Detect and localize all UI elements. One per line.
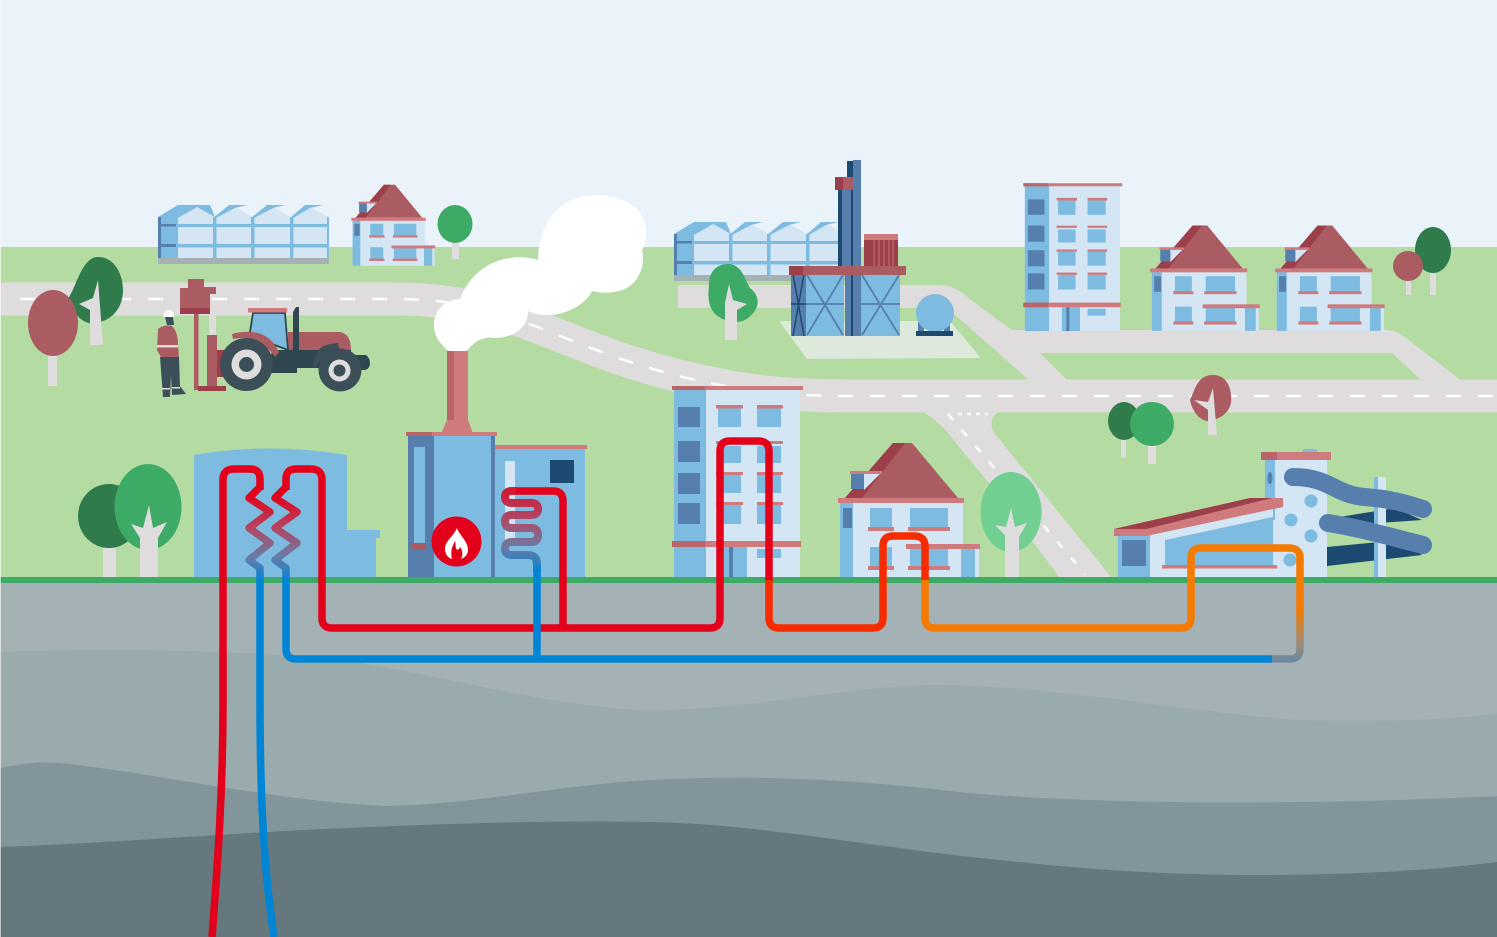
trees: left road [28, 257, 123, 386]
industrial plant [789, 160, 906, 336]
trees: far right [1393, 227, 1451, 295]
platform bar [789, 266, 906, 275]
road: main road [0, 299, 1497, 396]
tractor [220, 307, 370, 392]
pipe: heat exchanger 2 [275, 487, 297, 582]
pipe: network supply (red) [286, 441, 769, 628]
ground layer 2 [0, 650, 1497, 937]
pipe: network return (blue) [286, 580, 1272, 659]
geothermal doublet and heat network pipes [212, 441, 1300, 937]
pipe: production well (hot) [212, 469, 260, 937]
greenhouse: far left [158, 205, 329, 264]
tower [1265, 460, 1327, 578]
house: right 2 [1275, 226, 1385, 331]
grass field [0, 247, 1497, 579]
ground surface strip [0, 577, 1497, 584]
house: right 1 [1150, 226, 1260, 331]
rear wheel [220, 338, 273, 391]
tree: near greenhouse [708, 264, 758, 340]
road markings: branch [948, 414, 1085, 574]
stack [847, 161, 861, 201]
hall [1150, 508, 1273, 578]
pipe: heat exchanger 1 [249, 487, 270, 582]
pipe: network supply (red-orange) [769, 536, 925, 628]
pipe: transition to return [1270, 610, 1300, 659]
drilling rig [180, 279, 226, 391]
slide pole [1374, 477, 1386, 578]
factory [406, 432, 587, 578]
heat station building [194, 448, 380, 578]
road: branch to foreground [918, 410, 1112, 578]
worker [157, 310, 186, 397]
road markings: main road [20, 299, 1497, 396]
front fender [312, 343, 340, 368]
front wheel [318, 348, 362, 392]
chassis [268, 350, 351, 373]
road network [0, 285, 1497, 578]
icon: flame badge [432, 516, 482, 566]
ground layer 3 [0, 762, 1497, 937]
water park building with slides [1114, 449, 1423, 578]
road: back branch and upper right street [678, 285, 1462, 381]
tree: light green foreground [980, 472, 1042, 578]
ground layer 1 [0, 583, 1497, 937]
pipe: network supply (orange) [925, 548, 1300, 628]
house: far [351, 185, 435, 266]
ground layer 4 [0, 821, 1497, 937]
tree: far green [438, 205, 472, 259]
rear fender [232, 332, 279, 357]
counterweight [352, 355, 370, 370]
cab window [250, 313, 288, 350]
sky [0, 0, 1497, 248]
tall building: centre [672, 386, 803, 578]
hood [288, 332, 351, 350]
spherical tank [916, 294, 954, 336]
pipe: injection well (cold) [260, 580, 274, 937]
trees: mid right [1108, 375, 1231, 464]
slides [1293, 477, 1423, 509]
greenhouse: behind plant [674, 222, 845, 281]
plant platform [779, 321, 981, 359]
slide supports [1327, 508, 1422, 530]
red tank [864, 234, 898, 267]
house: centre [838, 443, 980, 578]
pipe: boiler feed [513, 491, 563, 628]
smoke cloud [434, 195, 646, 351]
cab roof [248, 308, 287, 312]
pipe: boiler return [533, 570, 541, 659]
frames [791, 274, 806, 336]
pipe: boiler coil [505, 491, 538, 572]
tower portholes [1304, 494, 1318, 508]
exhaust [293, 307, 299, 357]
chimney [441, 350, 473, 434]
trees: foreground left [78, 464, 182, 578]
tall building: right [1023, 183, 1122, 331]
